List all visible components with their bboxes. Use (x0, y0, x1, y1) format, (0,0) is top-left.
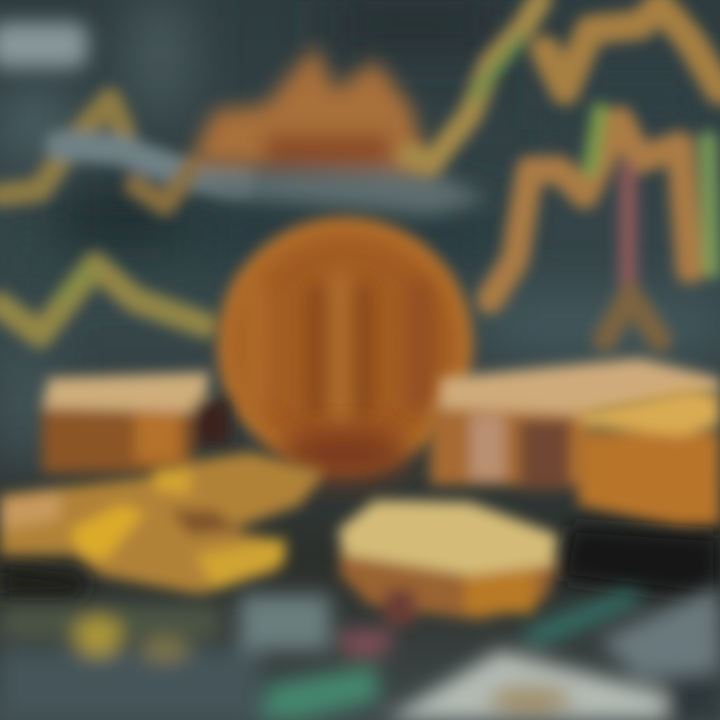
coin symbol (255, 280, 420, 420)
papers and charts foreground (0, 585, 720, 720)
gold bars: front left pile (0, 452, 325, 595)
background tonal patches (0, 0, 720, 460)
gold bar: front centre (338, 500, 560, 625)
bitcoin coin (217, 217, 473, 481)
shadow under bars (560, 525, 720, 600)
gold bar: back left (42, 372, 230, 473)
chart line: left upper (0, 100, 240, 205)
top left pale label blur (0, 22, 88, 68)
chart line: left lower (0, 265, 205, 335)
gold bars: right stack (430, 358, 720, 528)
chart area: centre orange ridge (180, 45, 490, 215)
chart line: top right multicolour (410, 0, 720, 340)
